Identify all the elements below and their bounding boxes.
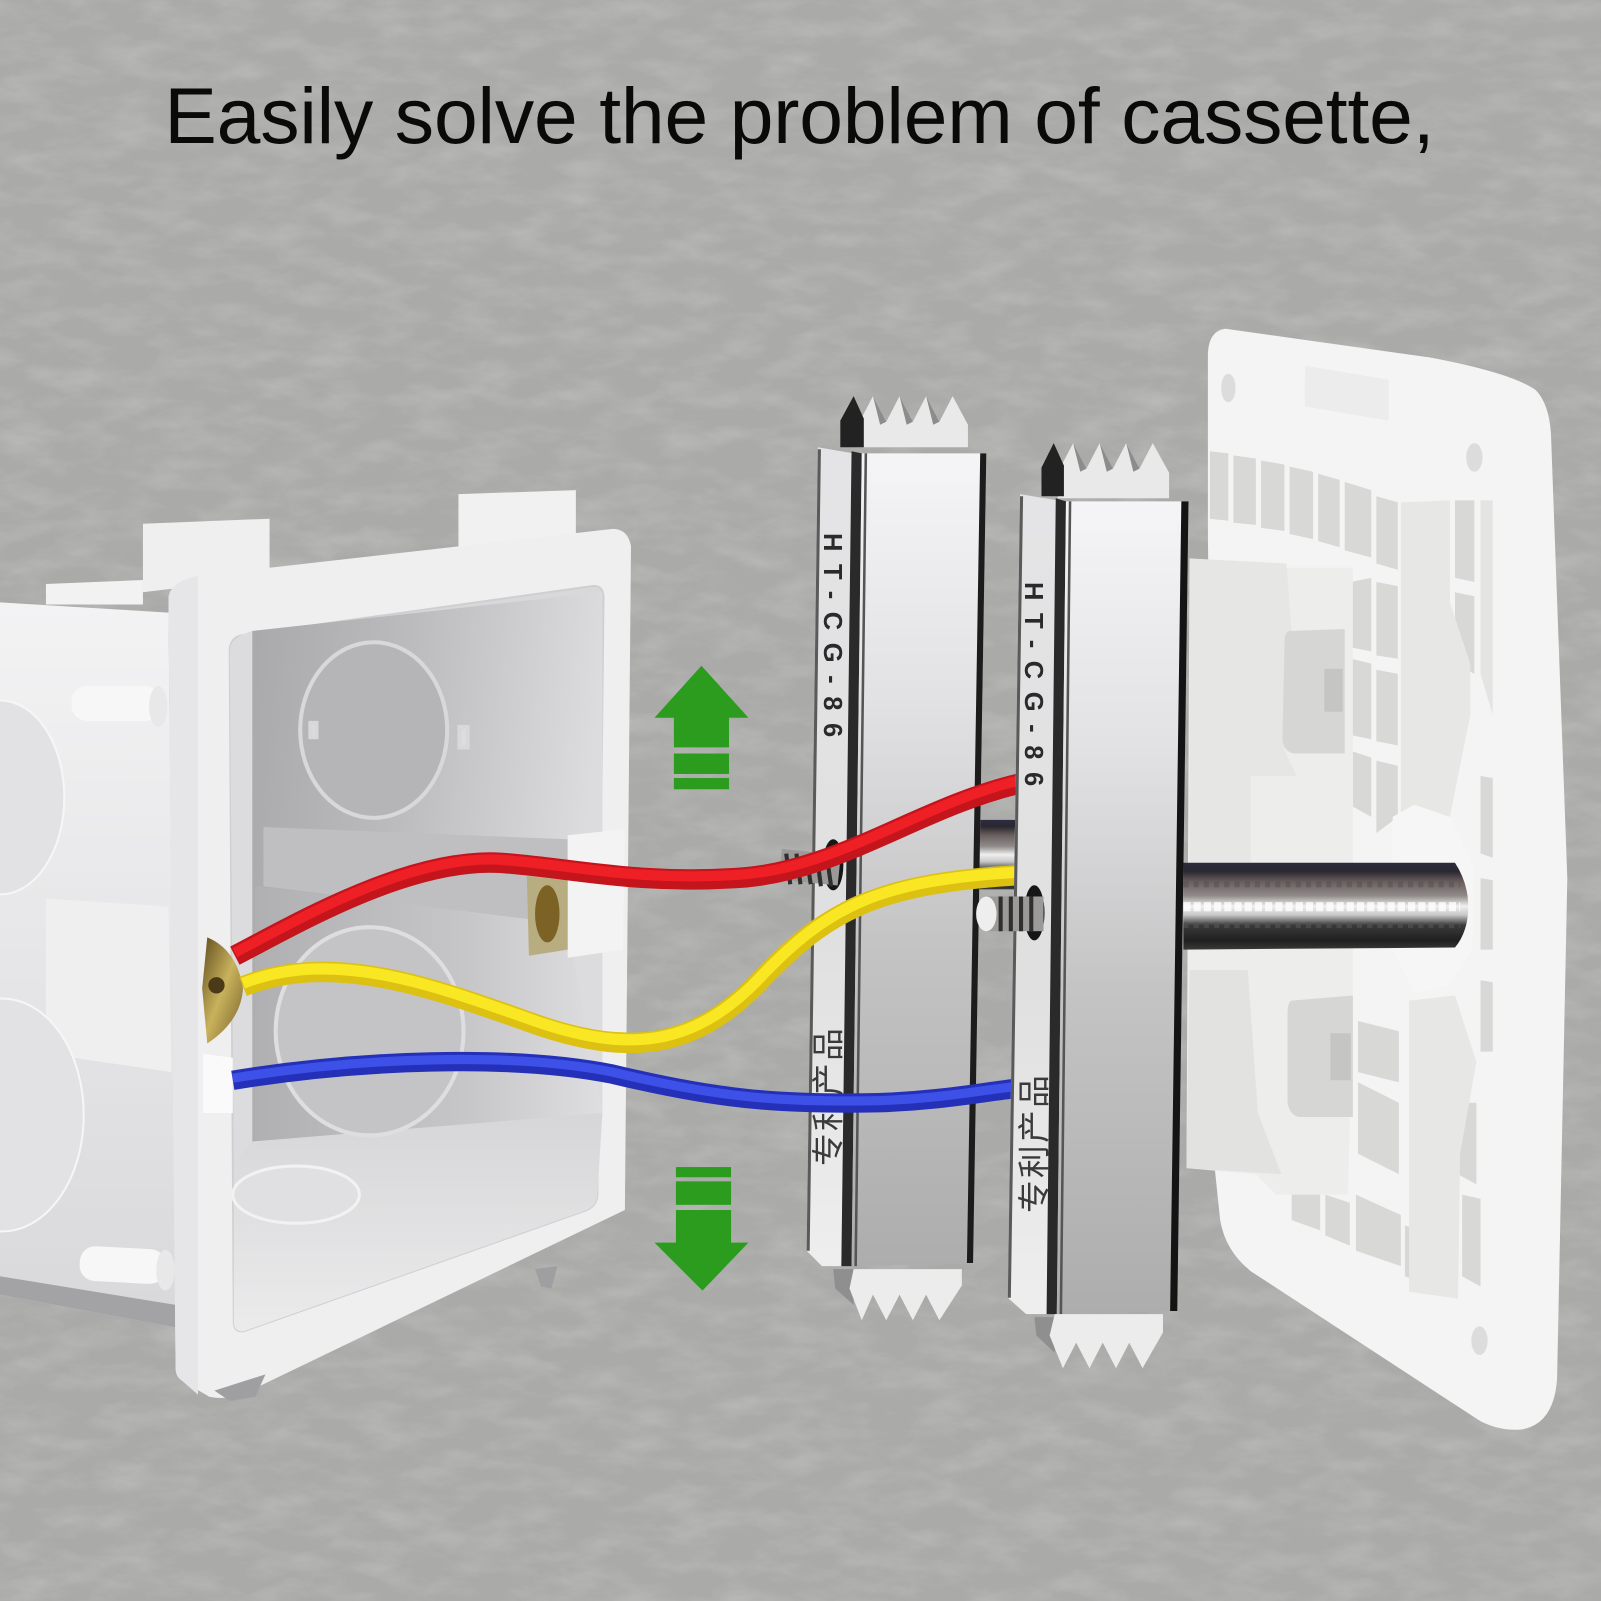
blue wire xyxy=(233,1060,1016,1103)
title: Easily solve the problem of cassette, xyxy=(164,72,1435,160)
flange left edge xyxy=(168,576,198,1395)
thin groove line xyxy=(856,453,866,1266)
screw hole xyxy=(823,839,843,890)
top dark tooth xyxy=(1041,443,1064,496)
dark groove xyxy=(1047,498,1066,1314)
interior left wall strip xyxy=(230,631,252,1164)
screw hole xyxy=(1024,885,1045,940)
red wire xyxy=(235,780,1021,956)
side knockouts xyxy=(0,700,84,1231)
left flange slot xyxy=(203,1054,233,1113)
wires xyxy=(233,780,1021,1103)
left dark edge xyxy=(1008,496,1023,1298)
box side wall xyxy=(0,602,176,1327)
lattice: central blocks xyxy=(1401,500,1470,819)
switch module xyxy=(1186,559,1353,1195)
brass terminal right xyxy=(527,876,568,956)
screw holes xyxy=(1221,374,1488,1355)
knockout upper xyxy=(300,642,468,818)
interior back wall xyxy=(252,592,602,1144)
bottom lip feet xyxy=(214,1266,557,1401)
plate top label xyxy=(1305,366,1389,421)
mounting strip left xyxy=(779,396,986,1320)
wall step band xyxy=(263,827,568,924)
lattice cells xyxy=(1210,451,1493,1287)
strip text patent: 专利产品 xyxy=(1016,1075,1053,1213)
socket lower xyxy=(1288,996,1353,1117)
side shadow xyxy=(0,1276,176,1327)
mounting strip right xyxy=(976,443,1188,1368)
side pegs xyxy=(71,686,175,1291)
right dark edge xyxy=(1170,501,1188,1311)
side raised band xyxy=(46,899,172,1072)
plate body xyxy=(1208,329,1567,1430)
screw stud xyxy=(976,896,1044,931)
bottom teeth xyxy=(850,1269,962,1320)
knockout lower xyxy=(276,927,464,1135)
top teeth xyxy=(858,396,968,447)
strip body left face xyxy=(807,447,854,1266)
thin groove line xyxy=(1061,501,1070,1314)
bottom teeth xyxy=(1050,1314,1163,1368)
threaded rod xyxy=(1183,863,1468,950)
socket upper xyxy=(1282,629,1345,754)
front flange xyxy=(168,529,631,1398)
down arrow xyxy=(654,1167,748,1291)
yellow wire xyxy=(243,872,1021,1043)
rod segment between strips xyxy=(976,820,1019,889)
strip main face xyxy=(1057,501,1187,1314)
strip text model: HT-CG-86 xyxy=(1019,582,1047,786)
switch plate xyxy=(1186,329,1567,1430)
knockout floor xyxy=(233,1166,359,1223)
top teeth xyxy=(1058,443,1169,498)
interior floor xyxy=(234,1113,602,1331)
top teeth shading xyxy=(1073,443,1139,472)
screw stud xyxy=(779,849,841,886)
dark groove xyxy=(841,451,862,1266)
strip main face xyxy=(852,453,986,1266)
strip text model: HT-CG-86 xyxy=(818,533,846,737)
junction box xyxy=(0,490,631,1401)
top teeth shading xyxy=(873,396,939,425)
right notch xyxy=(568,829,625,958)
up arrow xyxy=(654,666,748,789)
box interior xyxy=(230,586,603,1331)
top dark tooth xyxy=(840,396,864,447)
bottom gray tooth xyxy=(833,1269,854,1305)
top tabs xyxy=(46,490,576,604)
left dark edge xyxy=(807,449,821,1251)
brass terminal left xyxy=(202,937,243,1044)
right dark edge xyxy=(967,453,986,1263)
strip text patent: 专利产品 xyxy=(809,1028,846,1166)
strip body left face xyxy=(1008,494,1058,1314)
rod hole cut-out xyxy=(1393,805,1474,993)
bottom gray tooth xyxy=(1034,1317,1055,1353)
